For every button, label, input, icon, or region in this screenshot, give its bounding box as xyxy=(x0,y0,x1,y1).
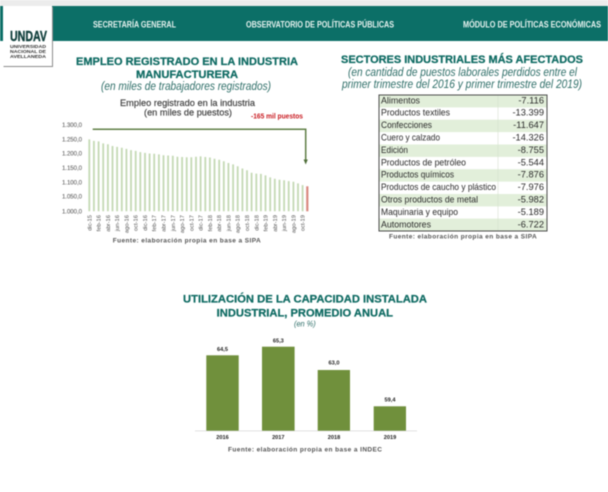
y axis labels: 1.150,0 xyxy=(62,166,83,172)
row: Productos de petróleo xyxy=(381,157,544,167)
bar: 2016 xyxy=(206,347,239,441)
x axis labels: jun-18 xyxy=(226,215,232,232)
x axis labels: feb-18 xyxy=(208,215,214,231)
bar chart: capacidad instalada xyxy=(195,338,417,441)
row: Automotores xyxy=(381,219,544,229)
callout: -165 mil puestos: -165 mil puestos xyxy=(251,111,303,120)
chart title: Empleo registrado en la industria xyxy=(120,98,256,109)
row: Maquinaria y equipo: -5.189 xyxy=(518,207,544,217)
row: Productos textiles: -13.399 xyxy=(512,108,544,118)
row: Productos textiles: Productos textiles xyxy=(381,108,450,118)
bar: 2019 xyxy=(374,398,406,441)
x axis labels: dic-15 xyxy=(87,215,93,231)
x axis labels: oct-18 xyxy=(245,215,251,231)
bars: monthly employment xyxy=(89,139,303,211)
x axis labels: dic-16 xyxy=(143,215,149,231)
header band xyxy=(0,6,608,41)
row: Alimentos xyxy=(381,95,544,105)
row: Confecciones: -11.647 xyxy=(513,120,544,130)
x axis labels: dic-18 xyxy=(254,215,260,231)
x axis labels: ago-17 xyxy=(180,215,186,233)
row: Automotores: Automotores xyxy=(381,219,431,229)
heading: utilización de la capacidad: INDUSTRIAL, PROMEDIO ANUAL xyxy=(217,308,393,320)
source: table SIPA: Fuente: elaboración propia en base a SIPA xyxy=(389,233,537,240)
row: Cuero y calzado xyxy=(381,132,544,142)
heading: empleo registrado: EMPLEO REGISTRADO EN LA INDUSTRIA xyxy=(76,56,298,68)
row: Automotores: -6.722 xyxy=(518,219,544,229)
x axis labels: ago-19 xyxy=(291,215,297,233)
bar: 2016: 2016 xyxy=(216,435,229,441)
row: Productos textiles xyxy=(381,108,544,118)
heading: utilización de la capacidad xyxy=(183,292,427,329)
chart title xyxy=(120,98,256,119)
row: Cuero y calzado: Cuero y calzado xyxy=(381,132,440,142)
row: Confecciones: Confecciones xyxy=(381,120,432,130)
table: sectores afectados xyxy=(379,95,547,231)
bar: 2018: 63,0 xyxy=(329,360,339,366)
heading: sectores industriales: (en cantidad de puestos laborales perdidos entre el xyxy=(348,67,577,79)
source: SIPA: Fuente: elaboración propia en base a SIPA xyxy=(113,237,261,244)
row: Alimentos: Alimentos xyxy=(381,95,420,105)
row: Otros productos de metal xyxy=(381,194,544,204)
x axis labels: oct-16 xyxy=(134,215,140,231)
arrow: drop in employment xyxy=(93,129,308,164)
row: Otros productos de metal: -5.982 xyxy=(518,194,544,204)
x axis labels: abr-18 xyxy=(217,215,223,232)
row: Cuero y calzado: -14.326 xyxy=(512,132,544,142)
row: Productos de petróleo: -5.544 xyxy=(518,157,544,167)
y axis labels: 1.050,0 xyxy=(62,195,83,201)
row: Maquinaria y equipo: Maquinaria y equipo xyxy=(381,207,458,217)
x axis labels: dic-17 xyxy=(199,215,205,231)
heading: utilización de la capacidad: (en %) xyxy=(294,319,316,329)
row: Productos químicos: -7.876 xyxy=(518,170,544,180)
heading: empleo registrado xyxy=(76,56,298,93)
x axis labels: abr-19 xyxy=(273,215,279,232)
x axis labels: feb-19 xyxy=(264,215,270,231)
x axis labels: abr-17 xyxy=(162,215,168,232)
bar: 2018 xyxy=(318,360,350,441)
y axis labels: 1.100,0 xyxy=(62,180,83,186)
bar: 2017 xyxy=(262,338,295,441)
y axis labels: 1.250,0 xyxy=(62,137,83,143)
bar: 2018: 2018 xyxy=(328,435,340,441)
x axis labels: oct-17 xyxy=(189,215,195,231)
row: Otros productos de metal: Otros productos de metal xyxy=(381,194,478,204)
bar: 2016: 64,5 xyxy=(217,347,228,353)
row: Confecciones xyxy=(381,120,544,130)
row: Edición: -8.755 xyxy=(518,145,544,155)
logo: UNDAV: UNDAV xyxy=(10,28,47,45)
y axis labels: 1.300,0 xyxy=(62,123,83,129)
x axis labels: feb-17 xyxy=(152,215,158,231)
x axis labels xyxy=(87,215,307,233)
heading: sectores industriales xyxy=(341,53,583,91)
bar: 2017: 65,3 xyxy=(273,338,284,344)
heading: utilización de la capacidad: UTILIZACIÓN DE LA CAPACIDAD INSTALADA xyxy=(183,292,427,305)
row: Productos de caucho y plástico: -7.976 xyxy=(518,182,544,192)
logo: UNDAV: NACIONAL DE xyxy=(10,49,46,54)
nav: observatorio: OBSERVATORIO DE POLÍTICAS PÚBLICAS xyxy=(246,18,394,30)
bar: last month highlighted xyxy=(306,186,308,211)
row: Productos de caucho y plástico: Productos de caucho y plástico xyxy=(381,182,496,192)
bar: 2019: 59,4 xyxy=(385,398,396,404)
y axis labels: 1.200,0 xyxy=(62,152,83,158)
row: Edición xyxy=(381,145,544,155)
x axis labels: jun-17 xyxy=(171,215,177,232)
heading: sectores industriales: SECTORES INDUSTRIALES MÁS AFECTADOS xyxy=(341,53,583,66)
y axis labels: 1.000,0 xyxy=(62,209,83,215)
nav: secretaría general: SECRETARÍA GENERAL xyxy=(93,20,176,30)
heading: empleo registrado: (en miles de trabajadores registrados) xyxy=(101,81,271,93)
y axis labels xyxy=(62,123,83,215)
row: Maquinaria y equipo xyxy=(381,207,544,217)
logo: UNDAV: UNIVERSIDAD xyxy=(10,44,47,49)
heading: empleo registrado: MANUFACTURERA xyxy=(136,69,238,81)
row: Productos de petróleo: Productos de petróleo xyxy=(381,157,466,167)
x axis labels: oct-19 xyxy=(301,215,307,231)
row: Edición: Edición xyxy=(381,145,408,155)
row: Productos químicos xyxy=(381,170,544,180)
bar: 2019: 2019 xyxy=(384,435,396,441)
row: Alimentos: -7.116 xyxy=(518,95,544,105)
x axis labels: ago-18 xyxy=(236,215,242,233)
chart title: (en miles de puestos) xyxy=(144,108,232,119)
heading: sectores industriales: primer trimestre del 2016 y primer trimestre del 2019) xyxy=(341,79,582,91)
x axis labels: jun-16 xyxy=(115,215,121,232)
x axis labels: abr-16 xyxy=(106,215,112,232)
x axis labels: ago-16 xyxy=(124,215,130,233)
source: INDEC: Fuente: elaboración propia en base a INDEC xyxy=(228,447,382,454)
row: Productos químicos: Productos químicos xyxy=(381,170,454,180)
chart: empleo registrado en la industria xyxy=(62,98,308,244)
x axis labels: jun-19 xyxy=(282,215,288,232)
logo: UNDAV: AVELLANEDA xyxy=(10,54,47,59)
logo: UNDAV xyxy=(3,6,53,67)
x axis labels: feb-16 xyxy=(97,215,103,231)
bar: 2017: 2017 xyxy=(272,435,285,441)
